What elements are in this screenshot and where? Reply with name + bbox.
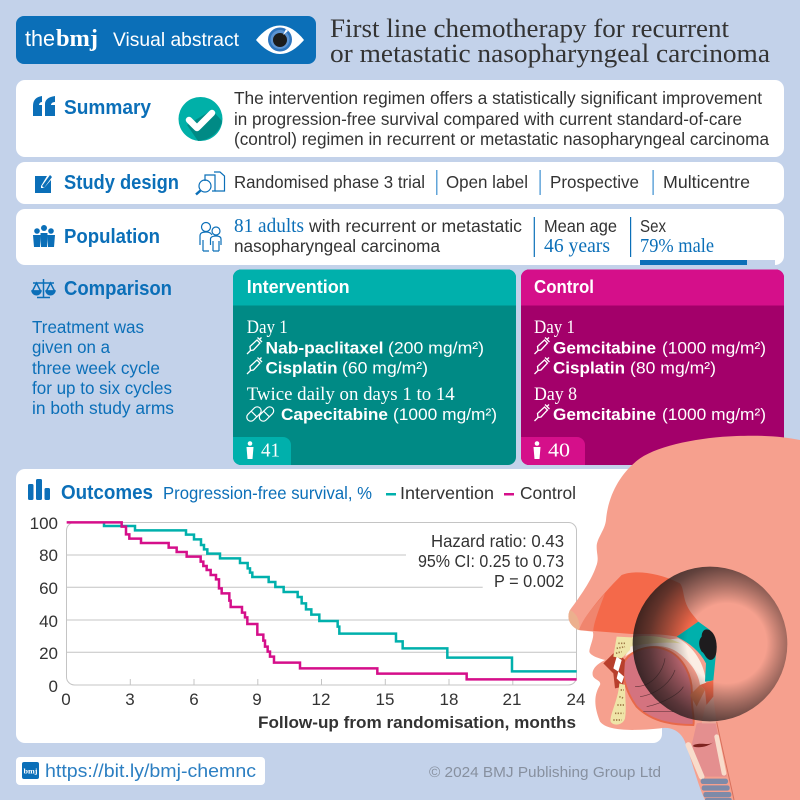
day 1 regimen: (80 mg/m²): [630, 359, 716, 377]
gum tissue: [603, 653, 625, 688]
mean age: 46 years: [544, 235, 610, 257]
header banner: [16, 16, 316, 64]
day 1 regimen: [247, 317, 484, 377]
lens highlight sphere: [633, 567, 787, 721]
control curve: [67, 522, 577, 679]
icon: eye: [256, 26, 304, 54]
icon: scales: [32, 279, 55, 298]
y axis labels: 80: [39, 546, 58, 565]
twice daily regimen: Twice daily on days 1 to 14: [247, 384, 455, 405]
y axis labels: 60: [39, 579, 58, 598]
heading: intervention: Intervention: [247, 277, 350, 297]
x axis labels: [61, 690, 585, 709]
day 1 regimen: (60 mg/m²): [342, 359, 428, 377]
hazard ratio statistics: P = 0.002: [494, 571, 564, 591]
sex: 79% male: [640, 235, 714, 257]
footer link: [16, 757, 265, 785]
summary text: [234, 88, 769, 149]
design attributes: [234, 170, 750, 195]
title: or metastatic nasopharyngeal carcinoma: [330, 39, 770, 68]
day 1 regimen: Day 1: [247, 317, 288, 338]
intervention curve: [104, 522, 577, 671]
x axis labels: 6: [189, 690, 199, 709]
design attributes: Open label: [446, 172, 528, 192]
icon: documents and magnifier: [196, 172, 224, 194]
url: https://bit.ly/bmj-chemnc: [45, 760, 256, 781]
heading: comparison: Comparison: [64, 278, 172, 300]
lower jaw bone: [611, 683, 626, 725]
tongue: [623, 647, 694, 725]
icon: group of people: [33, 225, 55, 247]
heading: population: Population: [64, 226, 160, 248]
icon: capsules: [245, 405, 275, 423]
day 1 regimen: Cisplatin: [553, 359, 625, 377]
sex: Sex: [640, 216, 666, 236]
logo: the bmj: the: [25, 26, 55, 51]
day 1 regimen: Cisplatin: [266, 359, 338, 377]
x axis labels: 15: [376, 690, 394, 709]
icon: bmj logo: [22, 762, 39, 779]
illustration: head and throat anatomy: [568, 436, 800, 800]
day 1 regimen: Gemcitabine: [553, 340, 656, 358]
legend: Control: [520, 483, 576, 503]
icon: syringe: [534, 358, 550, 374]
heading: control: Control: [534, 277, 594, 297]
logo: the bmj: [25, 26, 98, 52]
bone texture: [613, 643, 625, 720]
trachea rings: [701, 779, 732, 800]
x axis labels: 24: [567, 690, 585, 709]
panel: study design: [16, 162, 784, 204]
x axis title: Follow-up from randomisation, months: [258, 713, 576, 732]
design attributes: Prospective: [550, 172, 639, 192]
x axis labels: 9: [252, 690, 262, 709]
banner label: Visual abstract: [113, 29, 240, 51]
x axis labels: 12: [312, 690, 330, 709]
x axis labels: 21: [503, 690, 521, 709]
heading: summary: Summary: [64, 97, 152, 119]
legend: Intervention: [400, 483, 494, 503]
chart subtitle: Progression-free survival, %: [163, 483, 372, 503]
y axis labels: [30, 514, 58, 696]
panel: comparison: [32, 278, 174, 418]
x axis labels: 3: [125, 690, 135, 709]
twice daily regimen: (1000 mg/m²): [393, 406, 497, 424]
icon: pencil and paper: [35, 175, 52, 193]
icon: two adults outline: [200, 222, 221, 251]
sex proportion bar: [640, 260, 775, 265]
summary text: in progression-free survival compared with current standard-of-care: [234, 109, 742, 129]
participant count: 40: 40: [548, 440, 570, 462]
mean age: [534, 216, 617, 257]
design attributes: Multicentre: [663, 172, 750, 192]
hazard ratio statistics: Hazard ratio: 0.43: [431, 531, 564, 551]
neck airway: [688, 697, 734, 800]
participant count: 41: 41: [261, 440, 280, 462]
summary text: (control) regimen in recurrent or metastatic nasopharyngeal carcinoma: [234, 129, 769, 149]
icon: bar chart: [28, 479, 50, 500]
panel: summary: [16, 80, 784, 157]
survival chart: [30, 514, 585, 732]
design attributes: Randomised phase 3 trial: [234, 172, 425, 192]
participant count: 41: [233, 437, 291, 465]
population description: nasopharyngeal carcinoma: [234, 236, 440, 256]
y axis labels: 40: [39, 612, 58, 631]
icon: syringe: [534, 338, 550, 354]
nasopharynx: [677, 622, 717, 682]
day 1 regimen: Nab-paclitaxel: [266, 340, 384, 358]
icon: syringe: [247, 358, 262, 374]
nasal cavity: [579, 572, 698, 637]
panel: population: [16, 209, 784, 265]
icon: syringe: [247, 338, 262, 354]
hazard ratio statistics: [418, 531, 564, 591]
x axis labels: 18: [440, 690, 458, 709]
summary text: The intervention regimen offers a statistically significant improvement: [234, 88, 762, 108]
treatment note: three week cycle: [32, 358, 160, 378]
day 1 regimen: Day 1: [534, 317, 575, 338]
panel: control arm: [521, 270, 784, 465]
population description: [234, 215, 522, 256]
treatment note: Treatment was: [32, 317, 144, 337]
title: First line chemotherapy for recurrent: [330, 14, 730, 43]
y axis labels: 20: [39, 644, 58, 663]
day 1 regimen: [534, 317, 766, 377]
title: [330, 14, 770, 68]
icon: quote marks: [33, 96, 55, 116]
treatment note: given on a: [32, 337, 110, 357]
heading: outcomes: Outcomes: [61, 482, 153, 504]
logo: the bmj: bmj: [56, 26, 98, 52]
day 8 regimen: Day 8: [534, 384, 577, 405]
heading: study design: Study design: [64, 172, 179, 194]
tumour: [699, 629, 717, 660]
icon: syringe: [534, 404, 550, 421]
day 1 regimen: (1000 mg/m²): [662, 340, 766, 358]
y axis labels: 0: [49, 677, 58, 696]
hard palate bone: [613, 637, 632, 658]
mean age: Mean age: [544, 216, 617, 236]
airway crescent: [625, 638, 706, 685]
epiglottis: [700, 680, 713, 707]
population description: 81 adults: [234, 215, 304, 237]
treatment note: in both study arms: [32, 398, 174, 418]
treatment note: [32, 317, 174, 418]
copyright: © 2024 BMJ Publishing Group Ltd: [429, 764, 661, 781]
sex: [630, 216, 775, 265]
twice daily regimen: [245, 384, 497, 424]
teeth: [613, 657, 624, 683]
icon: bmj logo: bmj: [24, 766, 38, 776]
panel: intervention arm: [233, 270, 516, 465]
day 1 regimen: (200 mg/m²): [388, 340, 484, 358]
treatment note: for up to six cycles: [32, 378, 172, 398]
day 8 regimen: (1000 mg/m²): [662, 406, 766, 424]
icon: check mark: [178, 97, 222, 141]
legend: [386, 483, 576, 503]
day 8 regimen: [534, 384, 766, 424]
population description: with recurrent or metastatic: [308, 216, 522, 236]
hazard ratio statistics: 95% CI: 0.25 to 0.73: [418, 551, 564, 571]
nose tip: [568, 610, 579, 630]
head silhouette: [568, 436, 800, 800]
y axis labels: 100: [30, 514, 58, 533]
day 8 regimen: Gemcitabine: [553, 406, 656, 424]
x axis labels: 0: [61, 690, 71, 709]
twice daily regimen: Capecitabine: [281, 406, 388, 424]
chart frame and grid: [66, 522, 576, 685]
participant count: 40: [521, 437, 585, 465]
panel: outcomes: [16, 469, 662, 743]
